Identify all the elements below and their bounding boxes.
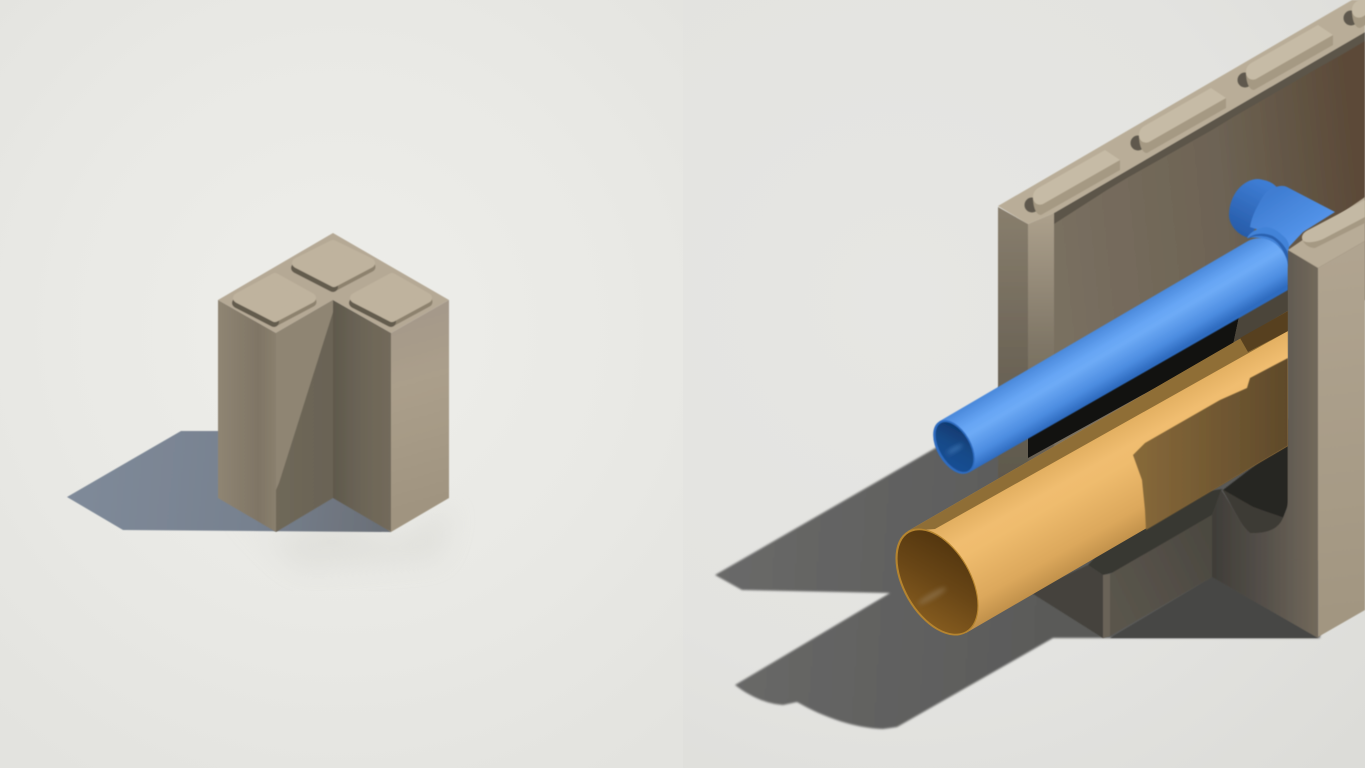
- blue pipe interior: [928, 416, 981, 478]
- orange pipe open end: [878, 514, 996, 650]
- blue pipe with elbow: [925, 179, 1335, 481]
- rail 2: [1130, 88, 1226, 153]
- top pad: back: [296, 245, 370, 287]
- inner right face: [333, 300, 391, 532]
- rail 2 end shadow: [1130, 136, 1146, 150]
- wall top rails: [1024, 0, 1365, 248]
- pipe upper shadow band: [908, 311, 1288, 531]
- wall shadow falling on pipe: [1133, 358, 1288, 530]
- rail 2 side: [1139, 98, 1226, 153]
- left outer face: [218, 300, 276, 532]
- sunlit wedge on inner left face: [276, 300, 333, 490]
- rail 3 side: [1246, 35, 1333, 90]
- left pad top: [238, 278, 311, 317]
- right column inner face: [1288, 250, 1318, 560]
- right pad shadowed side: [354, 303, 391, 322]
- orange pipe rim: [878, 514, 996, 650]
- orange pipe interior: [881, 517, 994, 647]
- curved fillet in recess: [1222, 489, 1285, 533]
- rail 1 top: [1033, 150, 1120, 205]
- rail 4 end shadow: [1344, 10, 1358, 26]
- step block right face: [1110, 515, 1212, 636]
- left column inner face: [1028, 213, 1054, 480]
- L-shaped concrete block: [218, 233, 449, 532]
- rail 1 side: [1033, 160, 1120, 215]
- right pad lower side: [356, 282, 428, 321]
- wall recess behind pipes: [1233, 285, 1288, 345]
- blue pipe rim: [925, 413, 983, 481]
- dark band at pipe top: [1240, 311, 1288, 352]
- right rail top: [1302, 200, 1365, 242]
- blue pipe body: [939, 238, 1288, 472]
- right column outer face: [1318, 241, 1365, 637]
- dark gap between pipes: [1028, 312, 1240, 458]
- rail 4 side: [1352, 0, 1365, 28]
- left background: [0, 0, 683, 768]
- elbow body: [1250, 186, 1335, 248]
- left column end face: [998, 207, 1028, 500]
- back wall interior: [1028, 32, 1365, 480]
- left pad shadowed side: [237, 303, 274, 322]
- collar dark rim: [1247, 234, 1290, 270]
- orange interior glint: [917, 585, 947, 607]
- rail 2 top: [1139, 88, 1226, 143]
- right column inner face with cutout: [1212, 253, 1318, 638]
- elbow socket bulb: [1229, 179, 1277, 238]
- back pad shadowed side: [296, 268, 333, 287]
- cast shadow of block: [67, 431, 391, 532]
- concrete channel: [998, 0, 1365, 638]
- right column top: [1288, 197, 1365, 268]
- right background: [683, 0, 1365, 768]
- right column rail: [1302, 200, 1365, 248]
- step block left face: [1030, 565, 1103, 638]
- rail 4: [1344, 0, 1365, 28]
- pipe collar: [1247, 227, 1289, 270]
- blue interior glint: [946, 443, 964, 455]
- top pad: right: [354, 278, 428, 322]
- right pad top: [355, 278, 427, 317]
- wall top surface: [998, 0, 1365, 224]
- block top surface: [218, 233, 449, 333]
- ground cast shadow: [715, 412, 1320, 729]
- rail 3 top: [1246, 25, 1333, 80]
- rail 3 end shadow: [1238, 72, 1252, 88]
- step block edge highlight: [1103, 574, 1110, 638]
- orange pipe: [878, 311, 1288, 650]
- back pad lower side: [298, 249, 370, 286]
- rail 3: [1238, 25, 1333, 90]
- left pad lower side: [238, 282, 312, 321]
- back pad top: [297, 245, 370, 282]
- blue pipe open end: [925, 413, 983, 481]
- shadowed floor under block: [1110, 577, 1318, 638]
- block top in shadow: [1088, 489, 1222, 575]
- wall underside shadow: [1054, 32, 1365, 224]
- orange pipe body: [908, 311, 1288, 633]
- right rail side: [1302, 212, 1365, 248]
- dark recess below pipe: [1223, 440, 1288, 518]
- ambient contact shadow: [218, 500, 455, 570]
- panel: right scene: [683, 0, 1365, 768]
- panel: left scene: [0, 0, 683, 768]
- top pad: left: [237, 278, 312, 322]
- rail 1 end shadow: [1024, 198, 1040, 212]
- right outer face: [391, 300, 449, 532]
- inner left face: [276, 300, 333, 532]
- rail 1: [1024, 150, 1120, 215]
- rail 4 top: [1352, 0, 1365, 18]
- right column: [1288, 197, 1365, 637]
